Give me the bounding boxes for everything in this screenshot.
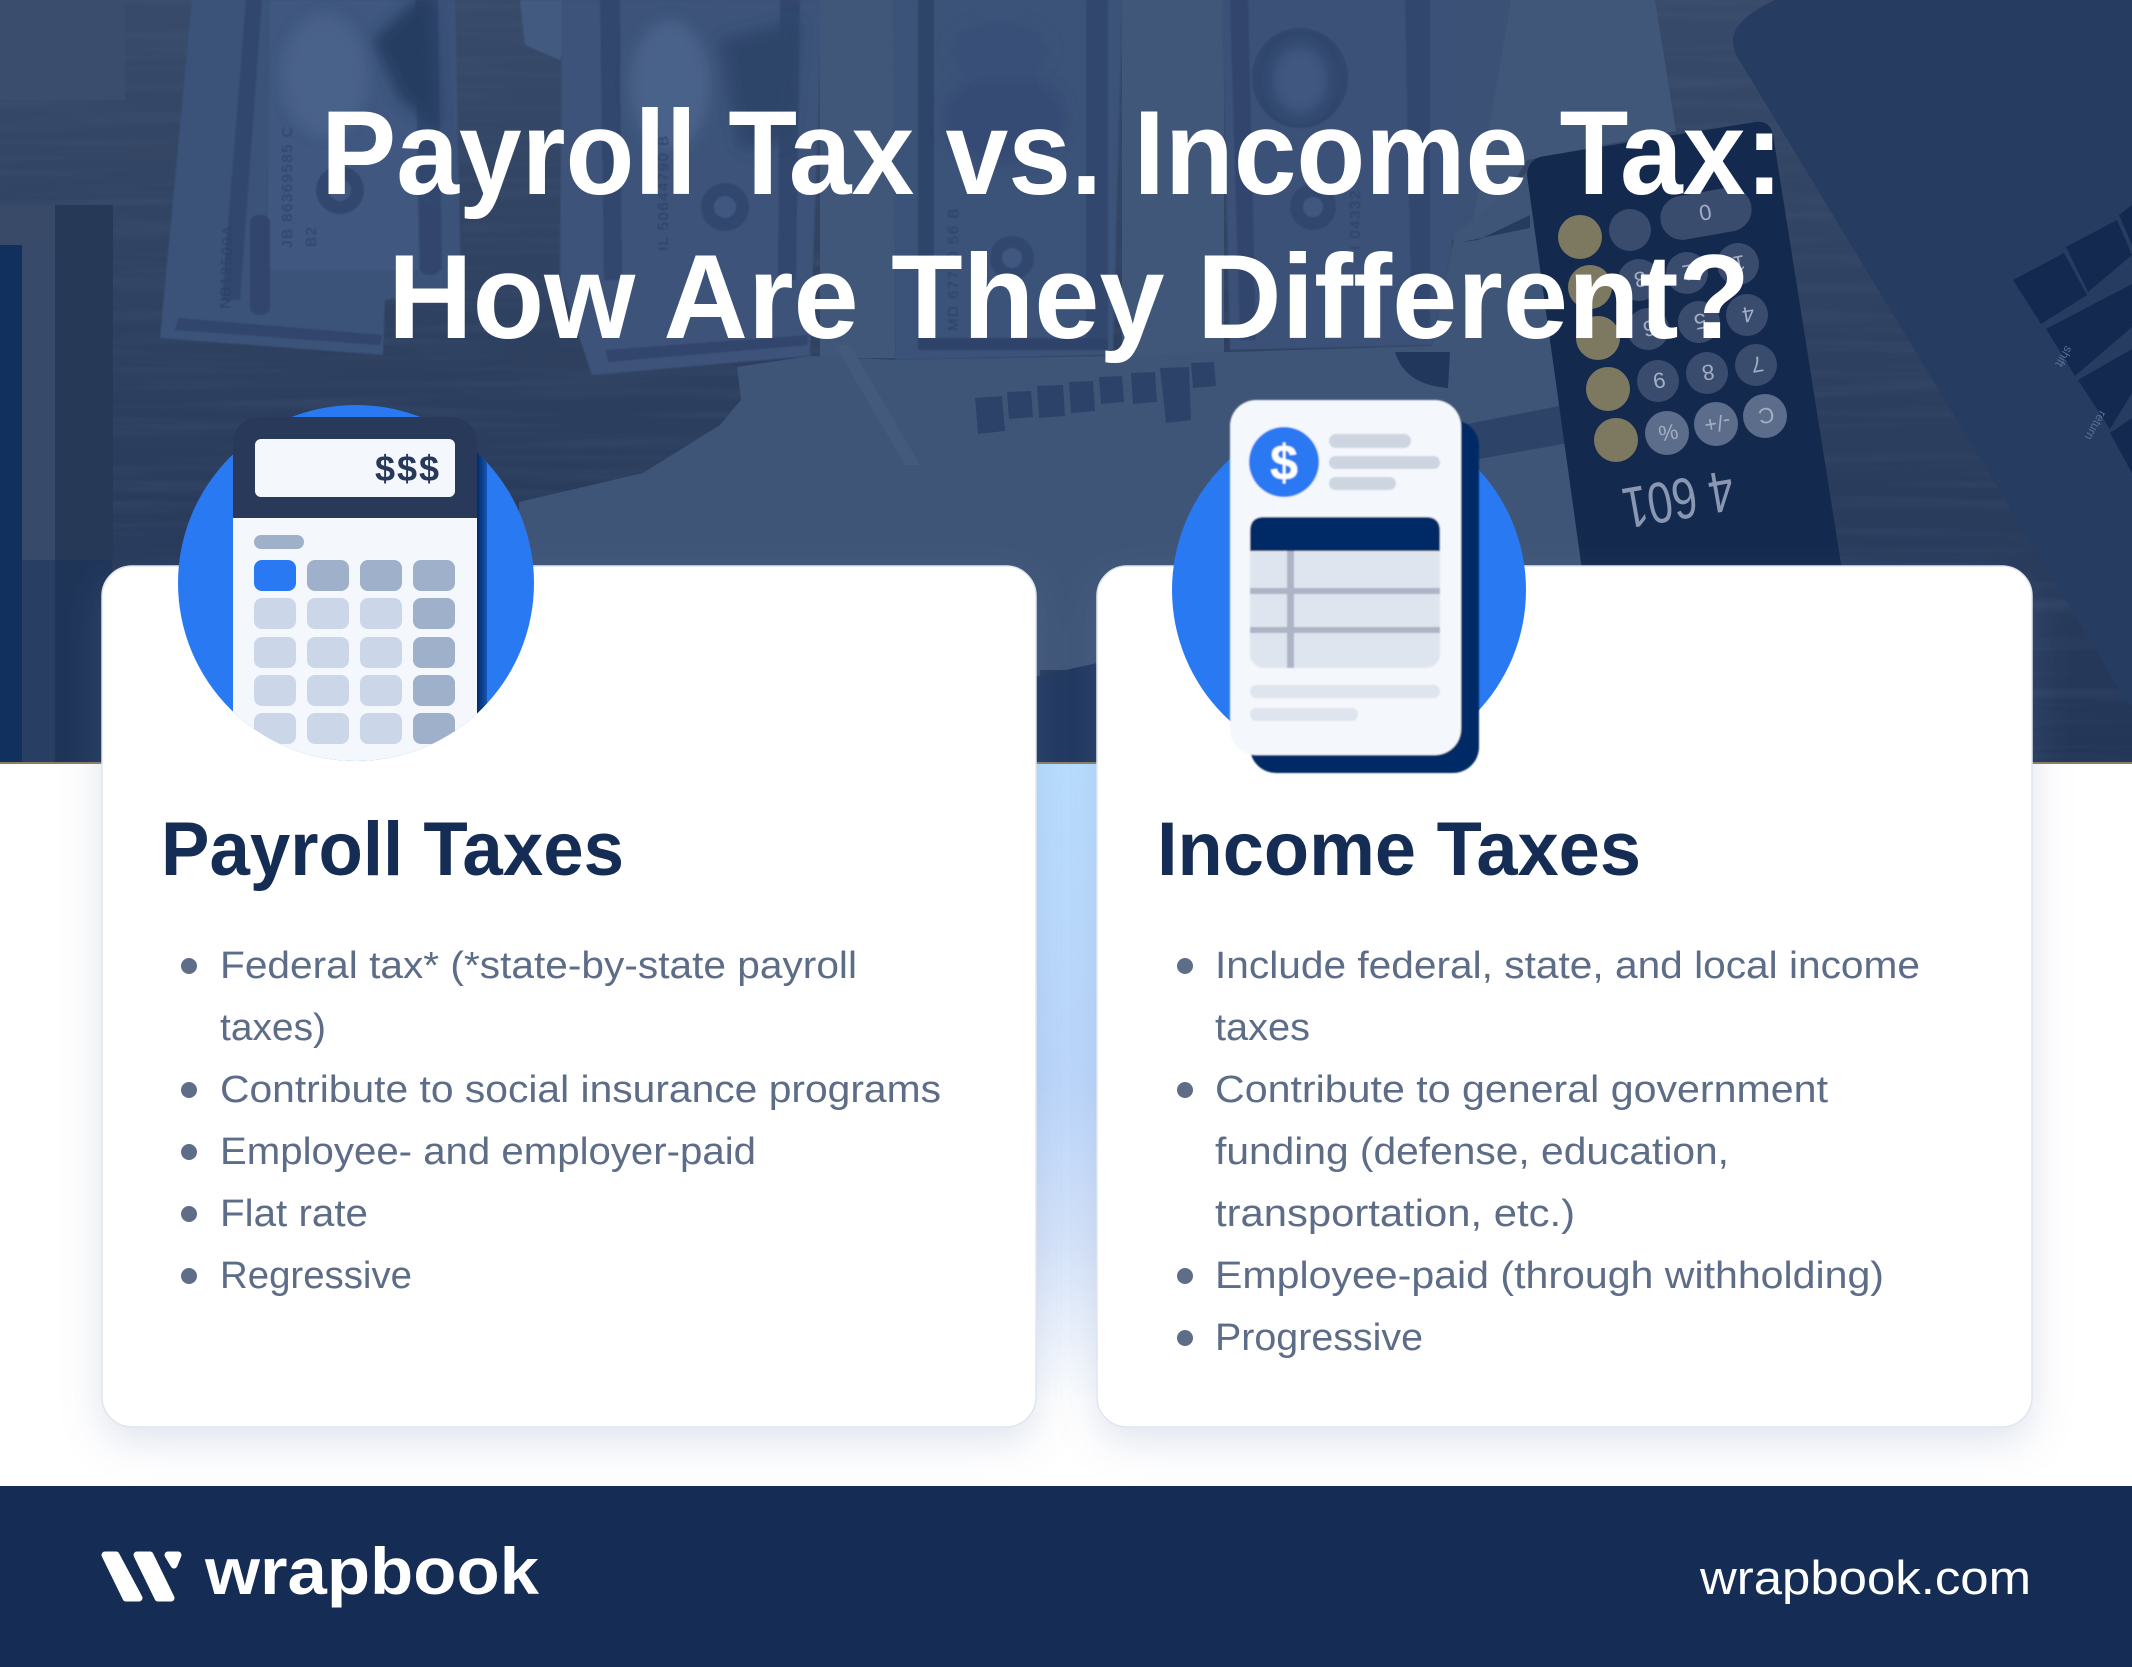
heading: payroll taxes: Payroll Taxes <box>161 807 624 892</box>
title: Payroll Tax vs. Income Tax: <box>321 86 1783 220</box>
dollar bill stack 4: I 04332 <box>1347 189 1364 250</box>
folded sheet crease <box>835 345 920 465</box>
bullet list: payroll taxes <box>181 945 941 1297</box>
dollar bill stack 1: NB13509A <box>217 224 237 309</box>
smartphone calculator: 8 <box>1700 359 1717 386</box>
smartphone calculator: 4 601 <box>1617 457 1739 541</box>
dollar bill stack 3 <box>893 0 1122 360</box>
smartphone calculator: % <box>1656 418 1680 446</box>
printed bar chart <box>975 362 1216 434</box>
bullet list: income taxes: Include federal, state, and local income <box>1215 945 1920 987</box>
paper strip between bills <box>820 0 895 358</box>
dollar badge: $ <box>1270 435 1298 491</box>
laptop: shift <box>2052 344 2076 370</box>
bullet list: income taxes: Contribute to general government <box>1215 1069 1828 1111</box>
bullet list: income taxes: Employee-paid (through withholding) <box>1215 1255 1884 1297</box>
dollar bill stack 1: B2 <box>303 226 320 247</box>
lower paper sheet <box>519 170 1590 764</box>
title: How Are They Different? <box>388 230 1750 364</box>
title <box>321 86 1783 364</box>
upside-down report paper <box>1449 0 1676 240</box>
smartphone calculator: 1 <box>1731 250 1748 277</box>
left wooden frame <box>0 205 113 764</box>
pie chart on the report <box>1395 352 1450 388</box>
bullet list: income taxes: transportation, etc.) <box>1215 1193 1575 1235</box>
bullet list: income taxes <box>1177 945 1920 1359</box>
icon: tax document on blue circle <box>1172 400 1526 773</box>
heading: income taxes: Income Taxes <box>1157 807 1641 892</box>
bullet list: payroll taxes: Federal tax* (*state-by-state payroll <box>220 945 857 987</box>
hero background photo: money, calculator and laptop on a desk <box>0 0 2132 764</box>
laptop: return <box>2082 408 2110 443</box>
dollar bill stack 4 <box>1222 0 1452 350</box>
smartphone calculator: 7 <box>1749 351 1766 378</box>
dollar bill stack 1: JB 86369585 C <box>279 125 296 248</box>
smartphone calculator: 4 <box>1740 301 1757 328</box>
bullet list: income taxes: taxes <box>1215 1007 1310 1049</box>
icon: calculator on blue circle: $$$ <box>375 448 439 489</box>
photo bottom edge <box>0 762 2132 764</box>
bullet list: payroll taxes: Employee- and employer-paid <box>220 1131 756 1173</box>
dollar bill stack 2: IL 50644790 B <box>655 134 672 251</box>
logo wordmark: wrapbook <box>204 1534 539 1608</box>
bullet list: payroll taxes: Regressive <box>220 1255 412 1297</box>
smartphone calculator <box>1527 122 1842 570</box>
smartphone calculator: 9 <box>1651 367 1668 394</box>
smartphone calculator: 5 <box>1692 308 1709 335</box>
smartphone calculator: 0 <box>1697 199 1714 226</box>
panel: income taxes <box>1097 566 2032 1427</box>
paper with figures <box>1122 0 1224 358</box>
bullet list: payroll taxes: Flat rate <box>220 1193 368 1235</box>
dark band on report <box>1462 400 1596 462</box>
logo mark: wrapbook W <box>105 1555 178 1598</box>
bullet list: income taxes: Progressive <box>1215 1317 1423 1359</box>
smartphone calculator: 2 <box>1680 259 1697 286</box>
dollar badge <box>1249 427 1319 497</box>
smartphone calculator: C <box>1756 402 1776 429</box>
smartphone calculator: -/+ <box>1702 409 1732 438</box>
smartphone calculator: 6 <box>1641 315 1658 342</box>
dollar bill stack 2 <box>520 0 822 375</box>
table <box>1250 517 1440 668</box>
bullet list: payroll taxes: Contribute to social insurance programs <box>220 1069 941 1111</box>
icon: calculator on blue circle <box>178 405 534 780</box>
website url: wrapbook.com <box>1699 1551 2031 1604</box>
dark desk below the sheet <box>1030 640 1200 764</box>
dollar bill stack 3: MD 67700 56 B <box>945 207 962 331</box>
bullet list: income taxes: funding (defense, education, <box>1215 1131 1729 1173</box>
laptop <box>1733 0 2132 706</box>
panel: payroll taxes <box>102 566 1036 1427</box>
smartphone calculator: 3 <box>1632 266 1649 293</box>
bullet list: payroll taxes: taxes) <box>220 1007 326 1049</box>
dollar bill stack 1 <box>160 0 461 355</box>
footer bar <box>0 1486 2132 1667</box>
blue gradient between the cards <box>1030 764 1102 1404</box>
